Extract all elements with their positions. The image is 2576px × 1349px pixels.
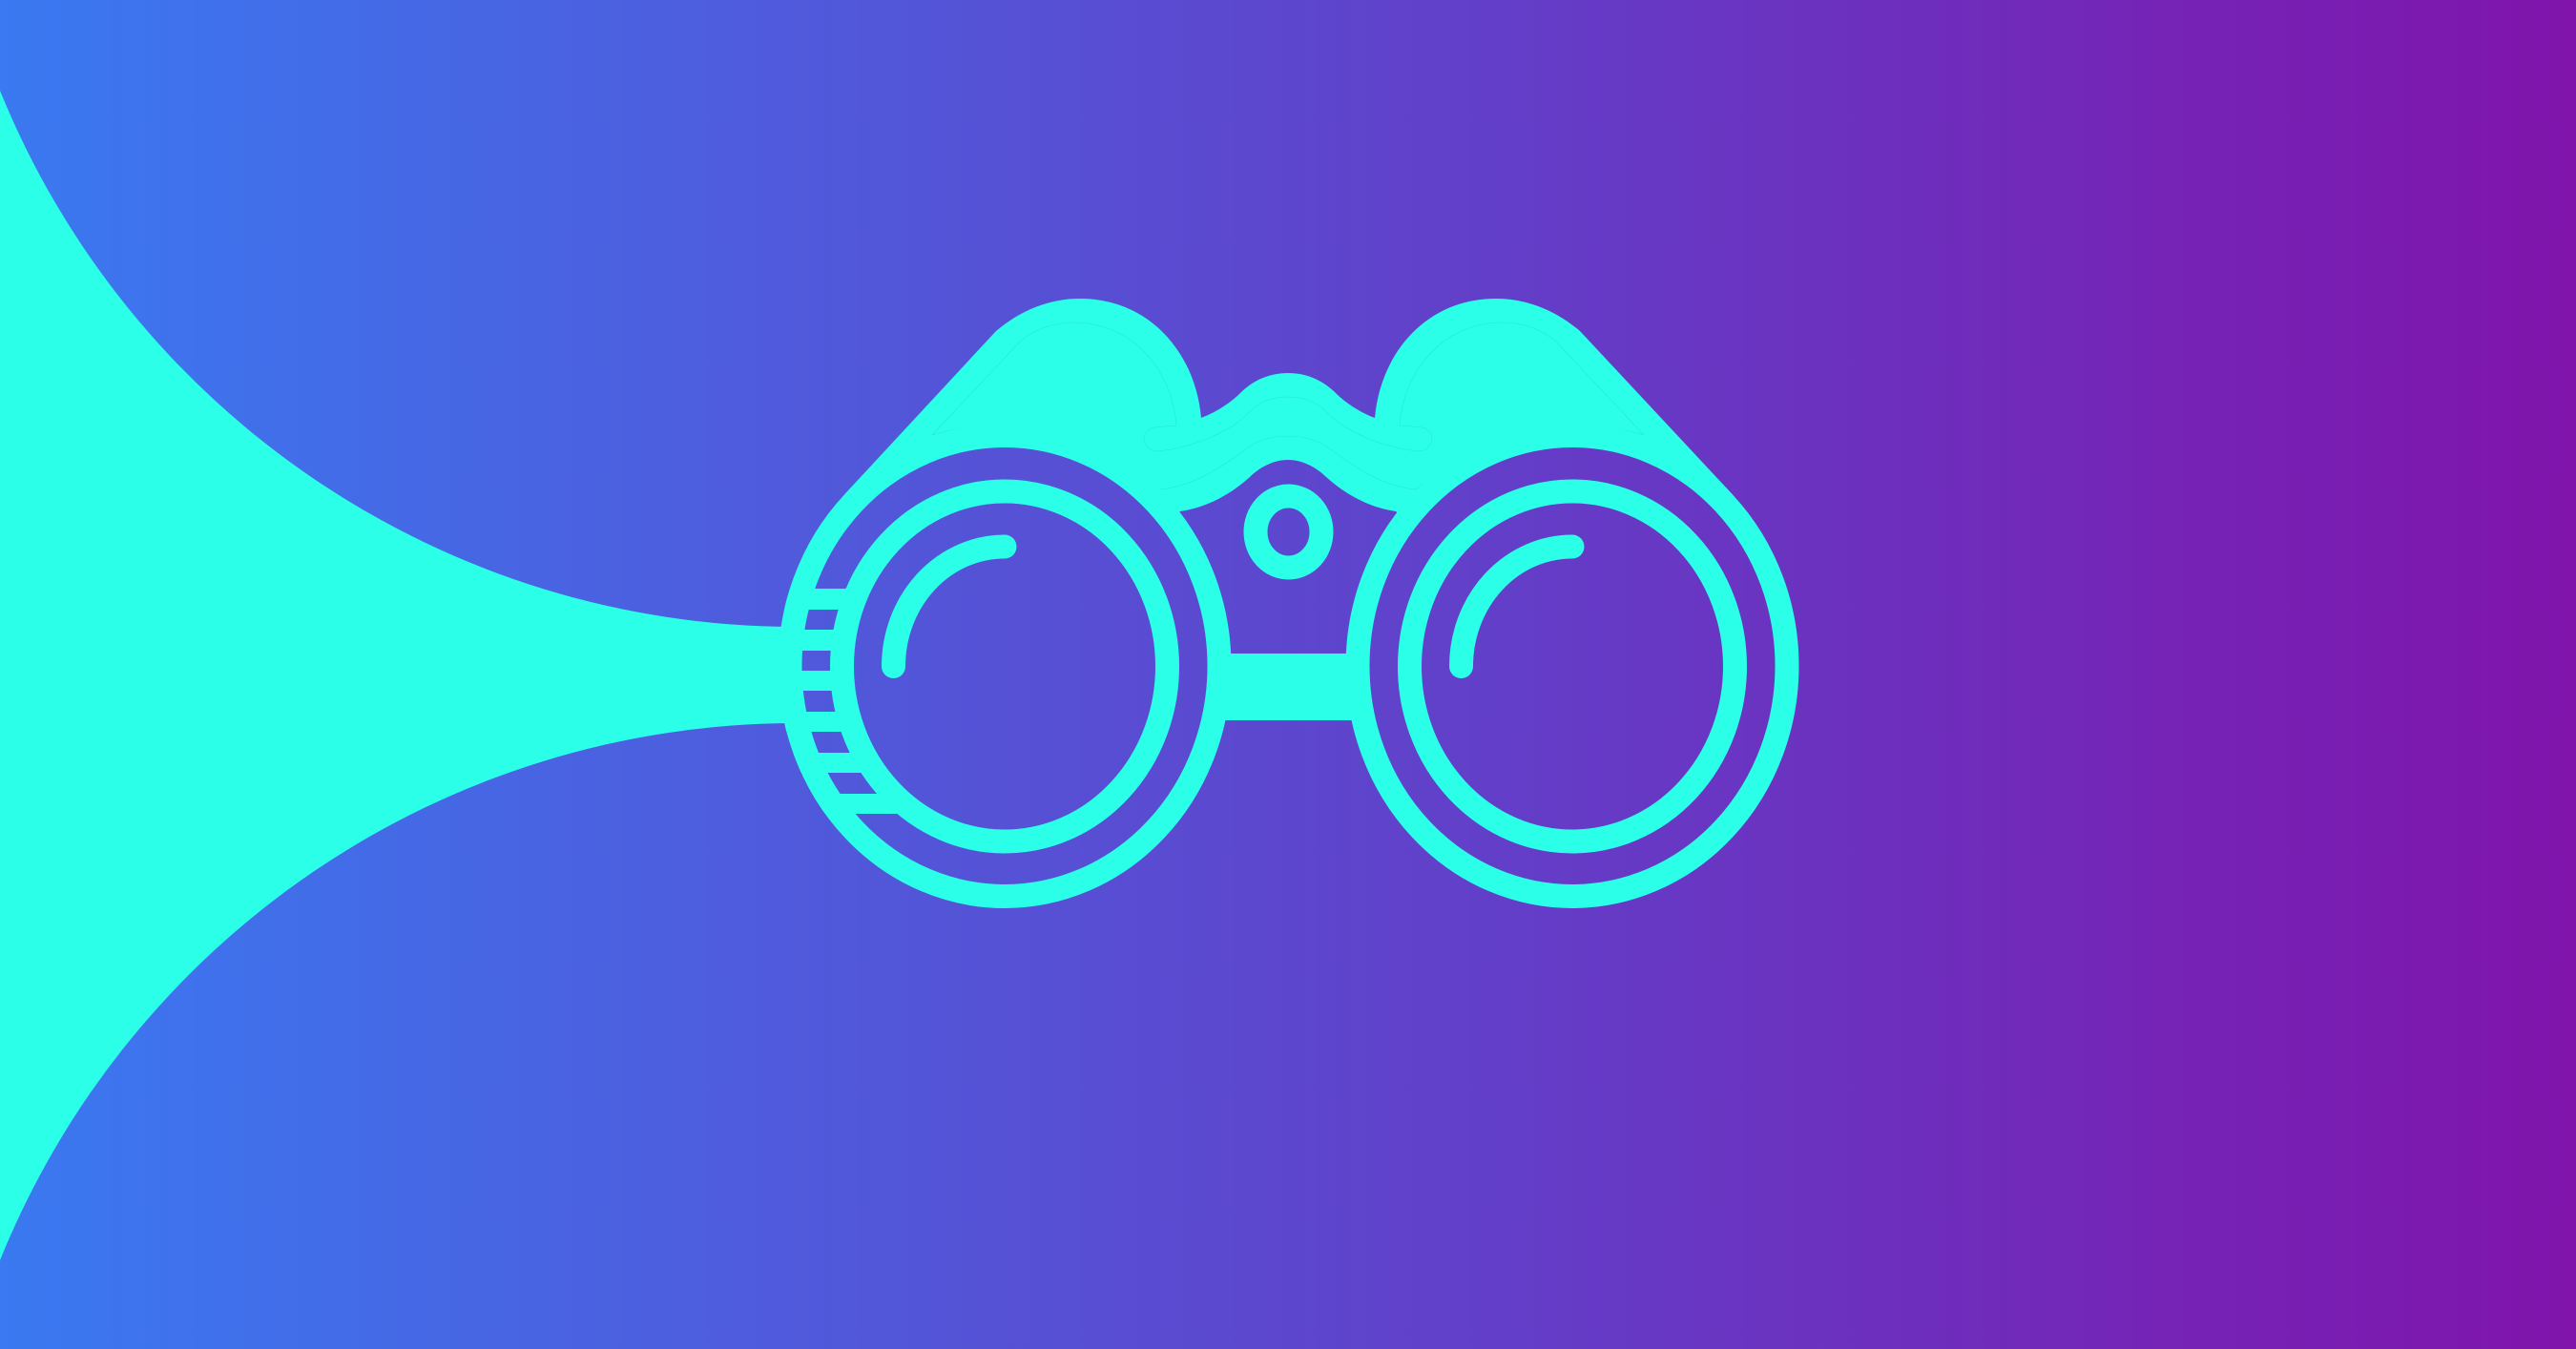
- right lens highlight: [1462, 547, 1572, 666]
- left lens highlight: [893, 547, 1005, 666]
- focus wheel: [1256, 496, 1321, 568]
- right lens outer ring: [1358, 435, 1787, 897]
- seam lines on eyecups and bridge: [932, 322, 1644, 489]
- left lens inner ring: [841, 491, 1168, 841]
- binocular top silhouette: [844, 299, 1733, 666]
- right lens inner ring: [1410, 491, 1735, 841]
- focus ladder ticks: [784, 589, 897, 814]
- light beam from left edge: [0, 91, 792, 1260]
- left lens: [773, 435, 1219, 897]
- crossbar between lenses: [1212, 654, 1364, 720]
- right lens: [1358, 435, 1787, 897]
- left lens outer ring: [790, 435, 1219, 897]
